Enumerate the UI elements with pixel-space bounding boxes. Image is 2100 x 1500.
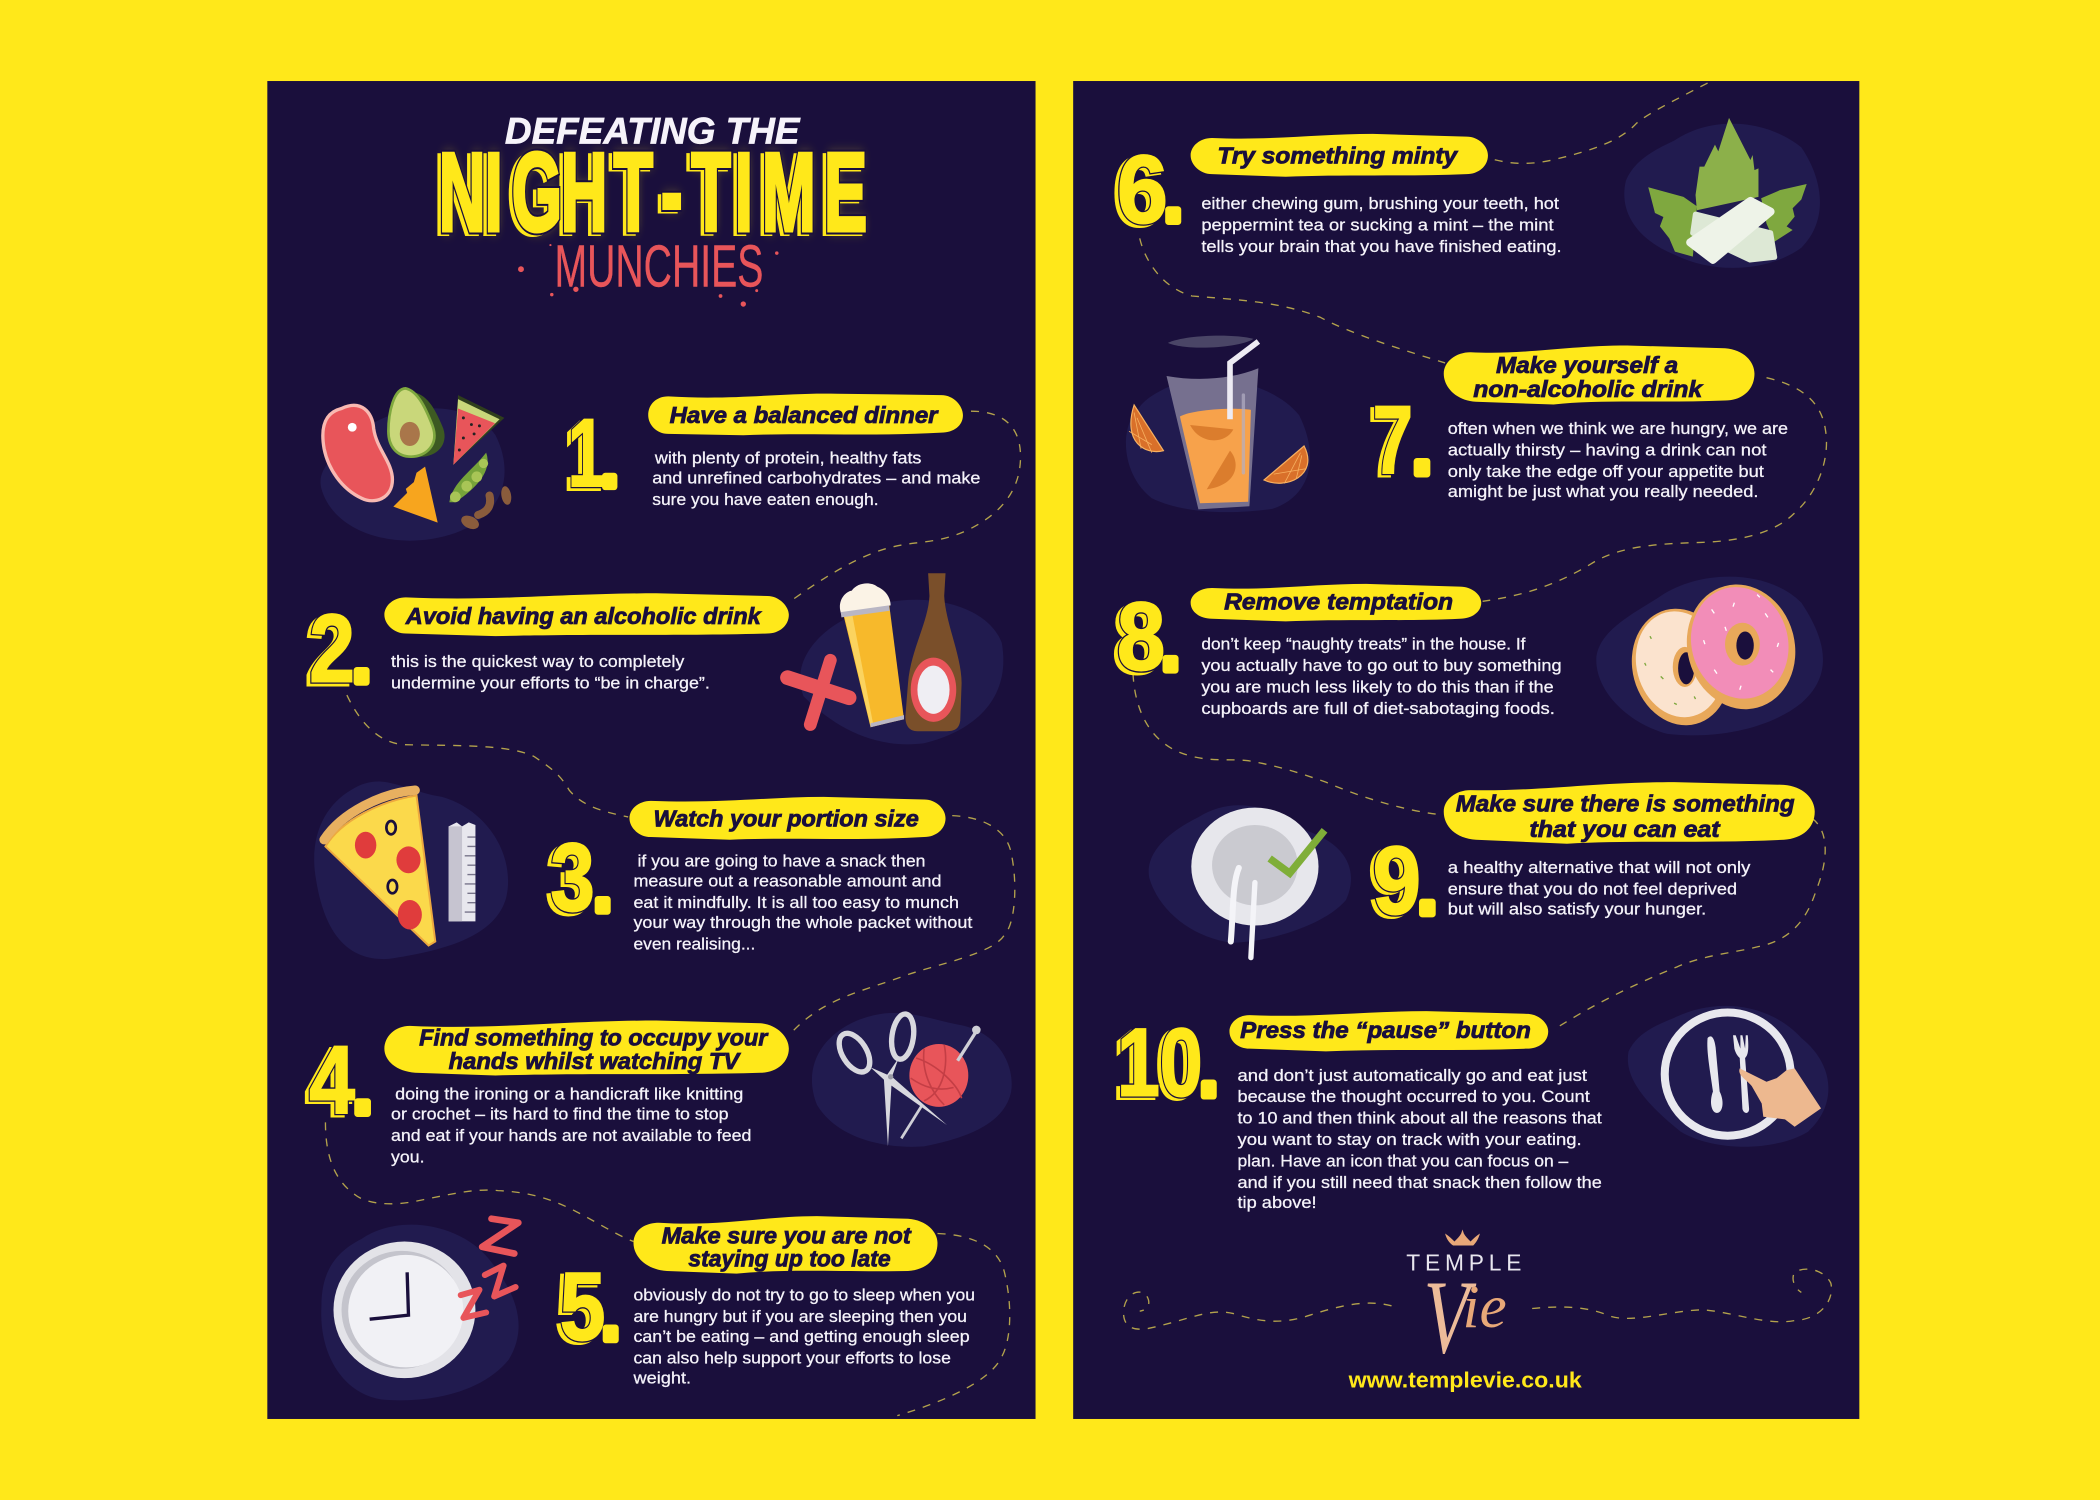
panel: right — [1073, 81, 1859, 1419]
title line: night-time: NIGHT-TIME — [439, 131, 867, 255]
text block 7: often when we think we are hungry, we are — [1448, 420, 1788, 438]
heading pill 4 — [384, 1021, 789, 1075]
text block 7: amight be just what you really needed. — [1448, 483, 1758, 501]
number 3: 3 — [550, 825, 595, 932]
tip 4 — [305, 1013, 1012, 1166]
title line: munchies — [518, 235, 779, 307]
number 3: 3 — [546, 827, 591, 934]
text block 10: and don’t just automatically go and eat just — [1238, 1067, 1588, 1085]
tip 6 — [1113, 118, 1820, 268]
icon: clock with sleep Zs — [321, 1219, 519, 1400]
heading pill 8: Remove temptation — [1224, 588, 1453, 614]
number 7: 7 — [1373, 387, 1413, 494]
number 2: 2 — [305, 598, 351, 705]
text block 9 — [1448, 859, 1751, 919]
title line: night-time: NIGHT-TIME — [435, 134, 863, 258]
icon: donuts — [1596, 572, 1823, 736]
text block 10: and if you still need that snack then follow the — [1238, 1174, 1602, 1192]
heading pill 6: Try something minty — [1217, 142, 1459, 168]
text block 9: but will also satisfy your hunger. — [1448, 901, 1706, 919]
number 4: 4 — [309, 1027, 355, 1134]
number 9: 9 — [1369, 830, 1417, 937]
number 7: 7 — [1369, 389, 1409, 496]
text block 9: a healthy alternative that will not only — [1448, 859, 1751, 877]
text block 10: you want to stay on track with your eating. — [1238, 1131, 1582, 1149]
text block 5: can also help support your efforts to lose — [633, 1349, 951, 1367]
number 1: 1 — [564, 403, 601, 510]
text block 3: if you are going to have a snack then — [638, 853, 925, 871]
text block 6: either chewing gum, brushing your teeth, hot — [1201, 195, 1559, 213]
icon: beer and bottle with cross — [788, 573, 1003, 744]
text block 1 — [652, 449, 980, 509]
number 1: 1 — [568, 400, 605, 507]
number 4: 4 — [305, 1030, 351, 1137]
heading pill 10 — [1229, 1011, 1548, 1051]
number 8: 8 — [1117, 584, 1165, 691]
number 4: 4 — [309, 1027, 355, 1134]
tip 5 — [321, 1216, 975, 1400]
text block 1: with plenty of protein, healthy fats — [654, 449, 921, 467]
heading pill 6 — [1191, 134, 1488, 177]
text block 3 — [633, 853, 973, 954]
text block 8: don’t keep “naughty treats” in the house. If — [1201, 636, 1526, 654]
tip 2 — [305, 573, 1003, 744]
icon: orange drink with straw — [1126, 336, 1310, 512]
website url: www.templevie.co.uk — [1348, 1367, 1582, 1392]
heading pill 3 — [629, 797, 946, 840]
icon: balanced dinner foods — [320, 388, 513, 541]
dashed connectors left — [325, 411, 1021, 1416]
heading pill 7: non-alcoholic drink — [1473, 376, 1704, 402]
number 5: 5 — [560, 1253, 605, 1360]
number 1: 1 — [568, 400, 605, 507]
text block 7: actually thirsty – having a drink can not — [1448, 441, 1767, 459]
text block 8: cupboards are full of diet-sabotaging foods. — [1201, 700, 1555, 718]
logo: Temple Vie — [1406, 1229, 1521, 1376]
text block 9: ensure that you do not feel deprived — [1448, 881, 1737, 899]
number 5: 5 — [560, 1253, 605, 1360]
heading pill 7 — [1444, 346, 1754, 404]
text block 2: undermine your efforts to “be in charge”. — [391, 674, 710, 692]
tip 8 — [1113, 572, 1823, 736]
heading pill 4: Find something to occupy your — [419, 1024, 769, 1050]
text block 2: this is the quickest way to completely — [391, 653, 685, 671]
heading pill 5: Make sure you are not — [662, 1223, 912, 1249]
number 2: 2 — [309, 596, 355, 703]
number 2: 2 — [309, 596, 355, 703]
text block 4: and eat if your hands are not available to feed — [391, 1127, 751, 1145]
right panel background — [1073, 81, 1859, 1419]
text block 10: because the thought occurred to you. Count — [1238, 1088, 1590, 1106]
number 10: 10 — [1113, 1012, 1199, 1119]
text block 6 — [1201, 195, 1562, 256]
text block 7 — [1448, 420, 1788, 501]
tip 3 — [314, 781, 973, 959]
squiggle decoration — [1124, 1269, 1832, 1329]
logo word: vie: ie — [1462, 1273, 1507, 1341]
heading pill 5: staying up too late — [688, 1245, 891, 1271]
logo word: temple: TEMPLE — [1406, 1250, 1521, 1276]
heading pill 2: Avoid having an alcoholic drink — [405, 603, 762, 629]
dashed connectors right — [1133, 83, 1826, 1027]
heading pill 10: Press the “pause” button — [1240, 1017, 1531, 1043]
heading pill 9: Make sure there is something — [1456, 791, 1795, 817]
heading pill 7: Make yourself a — [1496, 352, 1678, 378]
number 10: 10 — [1117, 1010, 1203, 1117]
title line: night-time: NIGHT-TIME — [439, 131, 867, 255]
number 6: 6 — [1117, 136, 1168, 243]
text block 4: doing the ironing or a handicraft like knitting — [395, 1086, 743, 1104]
text block 3: eat it mindfully. It is all too easy to munch — [633, 894, 959, 912]
number 3: 3 — [550, 825, 595, 932]
text block 6: tells your brain that you have finished eating. — [1201, 238, 1562, 256]
text block 2 — [391, 653, 710, 692]
title line: defeating the: DEFEATING THE — [505, 109, 801, 151]
number 6: 6 — [1117, 136, 1168, 243]
icon: plate with check and cutlery — [1149, 805, 1351, 958]
tip 7 — [1126, 336, 1788, 512]
text block 3: measure out a reasonable amount and — [633, 873, 942, 891]
icon: plate ring, cutlery and hand — [1628, 1006, 1828, 1147]
text block 4: you. — [391, 1149, 425, 1167]
heading pill 9: that you can eat — [1529, 816, 1721, 842]
icon: crown — [1445, 1229, 1480, 1246]
left panel background — [267, 81, 1036, 1419]
text block 5: weight. — [632, 1369, 691, 1387]
text block 5 — [632, 1286, 975, 1387]
text block 1: sure you have eaten enough. — [652, 491, 879, 509]
text block 8 — [1201, 636, 1562, 718]
number 10: 10 — [1117, 1010, 1203, 1117]
text block 5: can’t be eating – and getting enough sleep — [633, 1328, 970, 1346]
number 6: 6 — [1113, 139, 1164, 246]
heading pill 1 — [648, 394, 963, 435]
number 9: 9 — [1373, 827, 1421, 934]
text block 5: are hungry but if you are sleeping then you — [633, 1308, 967, 1326]
text block 10: to 10 and then think about all the reasons that — [1238, 1110, 1602, 1128]
heading pill 9 — [1444, 782, 1815, 844]
tip 10 — [1113, 1006, 1828, 1212]
number 8: 8 — [1117, 584, 1165, 691]
heading pill 2 — [384, 593, 789, 636]
number 8: 8 — [1113, 586, 1161, 693]
text block 7: only take the edge off your appetite but — [1448, 463, 1764, 481]
heading pill 1: Have a balanced dinner — [670, 402, 939, 428]
text block 10: plan. Have an icon that you can focus on – — [1238, 1153, 1569, 1171]
heading pill 3: Watch your portion size — [654, 805, 919, 831]
title line: night-time: NIGHT-TIME — [439, 131, 867, 255]
text block 4 — [391, 1086, 751, 1166]
number 5: 5 — [556, 1256, 601, 1363]
heading pill 4: hands whilst watching TV — [449, 1048, 741, 1074]
title line: munchies: MUNCHIES — [554, 235, 763, 300]
number 9: 9 — [1373, 827, 1421, 934]
text block 3: your way through the whole packet without — [633, 914, 973, 932]
text block 10 — [1238, 1067, 1602, 1212]
icon: scissors and yarn — [812, 1013, 1012, 1147]
heading pill 8 — [1191, 584, 1481, 621]
tip 1 — [320, 388, 980, 541]
text block 8: you are much less likely to do this than if the — [1201, 678, 1554, 696]
tip 9 — [1149, 782, 1815, 958]
text block 8: you actually have to go out to buy something — [1201, 657, 1562, 675]
text block 10: tip above! — [1238, 1194, 1317, 1212]
text block 1: and unrefined carbohydrates – and make — [652, 469, 980, 487]
panel: left — [267, 81, 1036, 1419]
logo word: vie: V — [1424, 1260, 1476, 1376]
text block 4: or crochet – its hard to find the time to stop — [391, 1106, 729, 1124]
text block 6: peppermint tea or sucking a mint – the mint — [1201, 216, 1554, 234]
number 7: 7 — [1373, 387, 1413, 494]
text block 5: obviously do not try to go to sleep when you — [633, 1286, 975, 1304]
title — [435, 109, 867, 307]
icon: pizza and ruler — [314, 781, 508, 959]
heading pill 5 — [633, 1216, 938, 1274]
icon: mint leaves and gum — [1624, 118, 1820, 268]
text block 3: even realising... — [633, 936, 755, 954]
